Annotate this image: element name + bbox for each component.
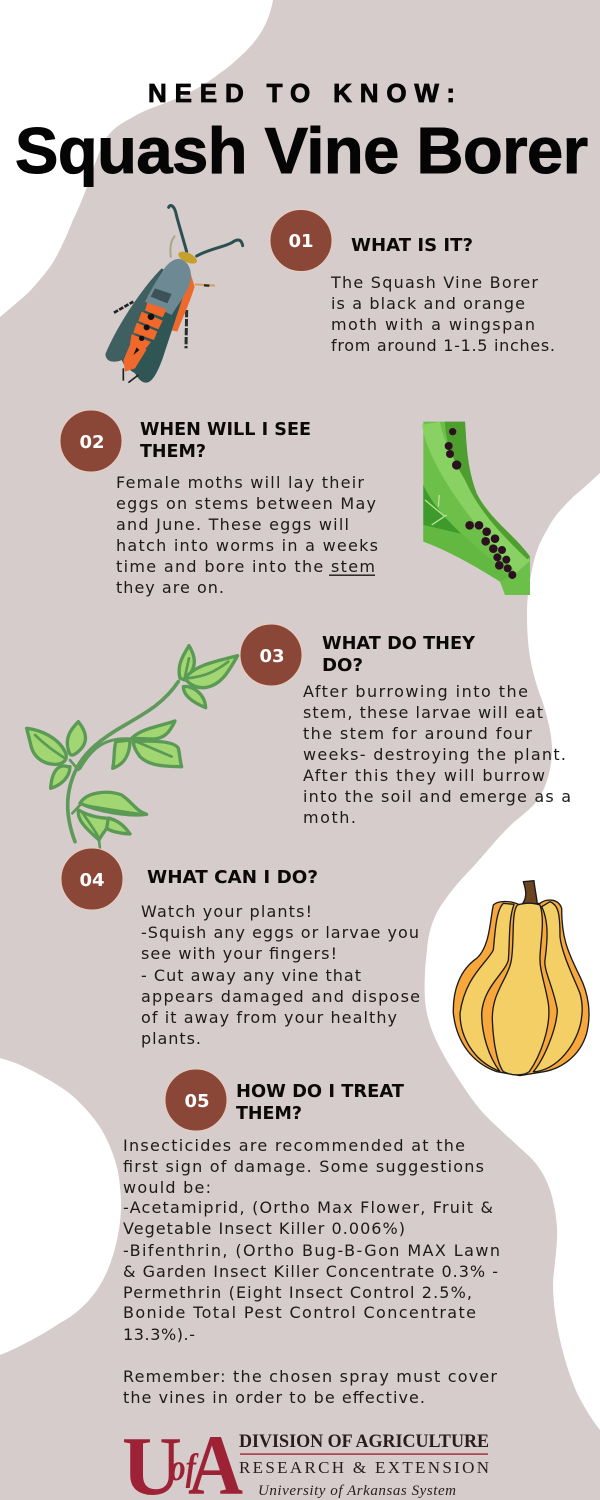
body text: Watch your plants!: [141, 902, 312, 921]
number badge 02: [60, 410, 122, 472]
body text: is a black and orange: [331, 294, 525, 313]
body text: Vegetable Insect Killer 0.006%): [123, 1219, 405, 1238]
body text: and June. These eggs will: [116, 515, 349, 534]
body text: Permethrin (Eight Insect Control 2.5%,: [123, 1283, 472, 1302]
number badge 03: 03: [259, 646, 285, 667]
body text: moth.: [303, 808, 356, 827]
section 5: how do I treat them: [123, 1069, 500, 1407]
logo wordmark: DIVISION OF AGRICULTURE: [239, 1432, 489, 1452]
heading: HOW DO I TREAT: [236, 1082, 404, 1102]
number badge 01: 01: [288, 231, 314, 252]
body text: weeks- destroying the plant.: [303, 745, 566, 764]
section 3: what do they do: [240, 624, 571, 827]
body text: first sign of damage. Some suggestions: [123, 1157, 484, 1176]
heading: WHAT DO THEY: [322, 634, 475, 654]
body text: The Squash Vine Borer: [330, 273, 538, 292]
main title: Squash Vine Borer: [15, 114, 588, 187]
body text: of it away from your healthy: [141, 1008, 397, 1027]
number badge 01: [270, 210, 332, 272]
body text: [116, 473, 378, 597]
number badge 03: [240, 624, 302, 686]
body text: -Squish any eggs or larvae you: [141, 923, 419, 942]
body text: Insecticides are recommended at the: [123, 1136, 465, 1155]
body text: After burrowing into the: [303, 682, 528, 701]
body text: - Cut away any vine that: [141, 966, 361, 985]
body text: into the soil and emerge as a: [303, 787, 571, 806]
body text: the stem for around four: [303, 724, 532, 743]
number badge 04: [61, 848, 123, 910]
logo wordmark: [239, 1432, 489, 1499]
body text: [141, 902, 420, 1048]
heading: THEM?: [236, 1104, 302, 1124]
section 2: when will I see them: [60, 410, 378, 597]
body text: & Garden Insect Killer Concentrate 0.3% -: [123, 1262, 498, 1281]
body text: 13.3%).-: [123, 1325, 195, 1344]
number badge 05: [165, 1069, 227, 1131]
number badge 05: 05: [184, 1091, 210, 1112]
body text: the vines in order to be effective.: [123, 1388, 425, 1407]
body text: -Acetamiprid, (Ortho Max Flower, Fruit &: [123, 1198, 493, 1217]
body text: plants.: [141, 1029, 201, 1048]
body text: After this they will burrow: [303, 766, 545, 785]
body text: they are on.: [116, 578, 224, 597]
logo: University of Arkansas Division of Agriculture: [122, 1417, 489, 1500]
icon: squash vine borer moth: [106, 206, 243, 383]
section 4: what can I do: [61, 848, 420, 1048]
body text: -Bifenthrin, (Ortho Bug-B-Gon MAX Lawn: [123, 1241, 500, 1260]
image: eggs on a green squash stem: [423, 422, 530, 595]
body text: [330, 273, 555, 355]
body text: Bonide Total Pest Control Concentrate: [123, 1303, 476, 1322]
number badge 02: 02: [79, 432, 105, 453]
body text: eggs on stems between May: [116, 494, 376, 513]
icon: green vine with leaves: [27, 646, 238, 849]
body text: from around 1-1.5 inches.: [331, 336, 555, 355]
heading: [236, 1082, 404, 1124]
heading: [140, 420, 311, 462]
body text: [303, 682, 571, 827]
title block: [15, 78, 588, 187]
logo mark: U of A: [122, 1417, 243, 1500]
body text: time and bore into the stem: [116, 557, 375, 576]
heading: WHEN WILL I SEE: [140, 420, 311, 440]
heading: [322, 634, 475, 676]
number badge 04: 04: [79, 870, 105, 891]
body text: would be:: [123, 1178, 211, 1197]
body text: moth with a wingspan: [331, 315, 535, 334]
kicker: need to know: NEED TO KNOW:: [148, 78, 455, 108]
heading: THEM?: [140, 442, 206, 462]
body text: stem, these larvae will eat: [303, 703, 543, 722]
logo mark: U of A: of: [170, 1447, 199, 1489]
body text: Female moths will lay their: [116, 473, 364, 492]
body text: see with your fingers!: [141, 944, 337, 963]
body text: hatch into worms in a weeks: [116, 536, 378, 555]
logo wordmark: University of Arkansas System: [258, 1483, 456, 1499]
heading: WHAT IS IT?: [351, 236, 473, 256]
body text: [123, 1136, 500, 1407]
logo wordmark: RESEARCH & EXTENSION: [239, 1458, 489, 1477]
heading: WHAT CAN I DO?: [147, 868, 318, 888]
body text: appears damaged and dispose: [141, 987, 420, 1006]
body text: Remember: the chosen spray must cover: [123, 1367, 497, 1386]
section 1: what is it: [270, 210, 555, 355]
icon: orange squash: [453, 881, 589, 1076]
heading: DO?: [322, 656, 363, 676]
